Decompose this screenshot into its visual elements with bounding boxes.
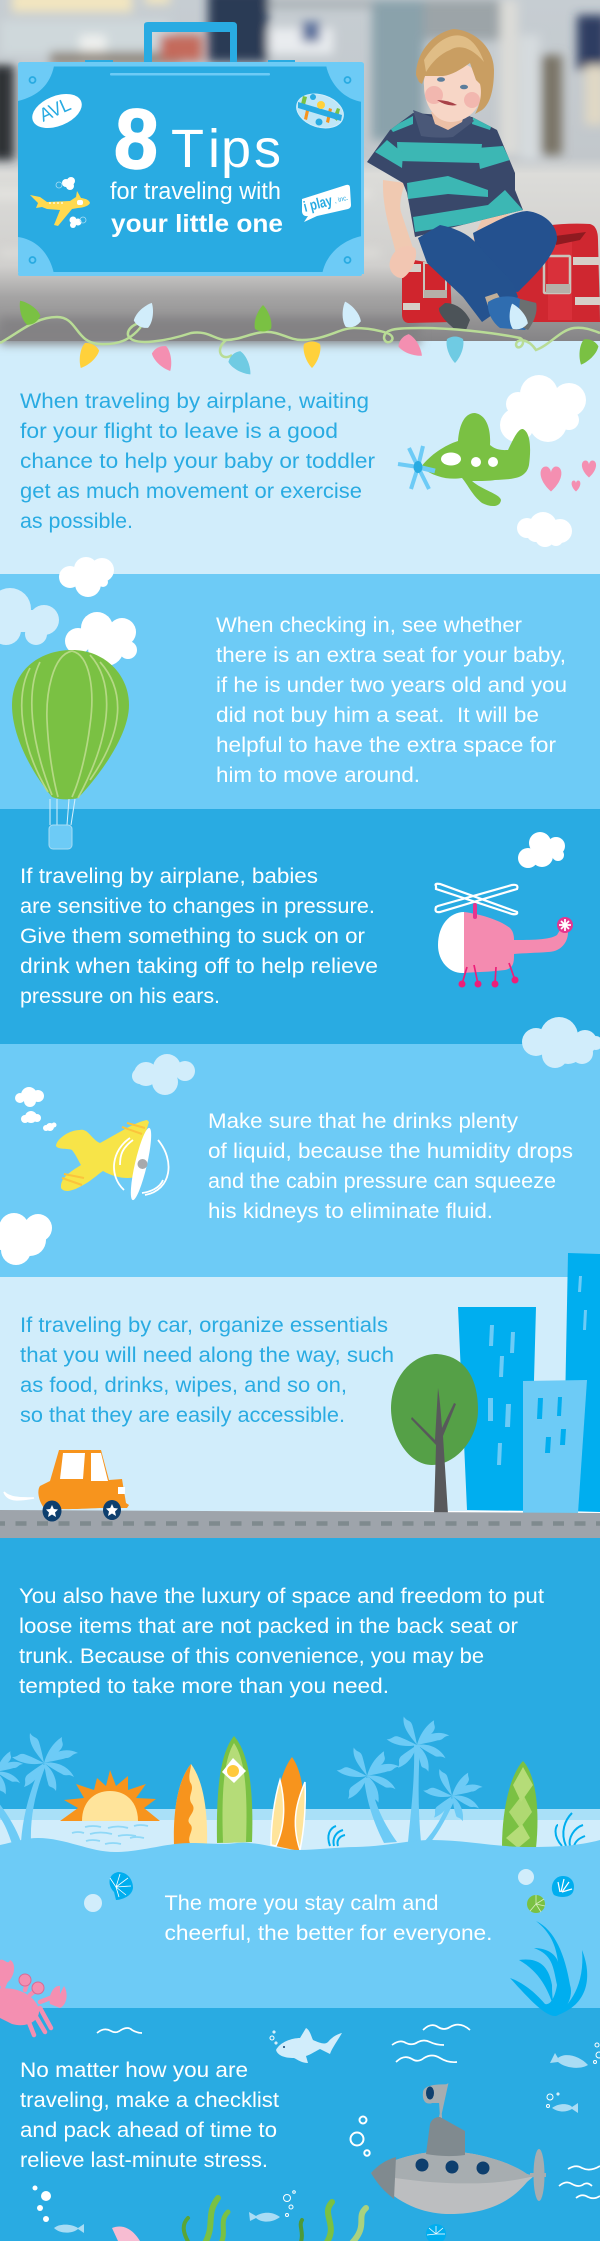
cloud: pale left (0, 588, 59, 645)
icon: large seaweed (510, 1921, 587, 2016)
hand (390, 246, 416, 278)
cloud: white by helicopter (518, 832, 565, 868)
fish and bubbles (32, 2043, 600, 2233)
water ripples (72, 1825, 148, 1844)
subtitle line 1: for traveling with (110, 178, 281, 205)
face (424, 62, 482, 122)
tip 1 text (20, 390, 375, 533)
water squiggles (97, 2025, 600, 2198)
tip 1 text: get as much movement or exercise (20, 480, 362, 503)
icon: green airplane (398, 413, 530, 506)
shells (84, 1869, 574, 1913)
surfboard: orange (271, 1757, 305, 1851)
cloud: white behind green plane (500, 375, 586, 442)
bulbs (20, 300, 598, 374)
tip 4 text: of liquid, because the humidity drops (208, 1140, 573, 1163)
surfboard: orange wave (174, 1764, 207, 1846)
beach scene (0, 1716, 600, 1860)
hair (416, 29, 494, 114)
tip 5 text: as food, drinks, wipes, and so on, (20, 1374, 347, 1397)
sticker: i play speech bubble: i play (302, 192, 335, 216)
tip 5 text (20, 1314, 394, 1427)
tip 3 text: If traveling by airplane, babies (20, 865, 318, 888)
suitcase title card (18, 22, 364, 276)
icon: city buildings (458, 1253, 600, 1513)
tip 3 text: Give them something to suck on or (20, 925, 365, 948)
icon: hot air balloon (12, 650, 129, 849)
surfboard: green flower (217, 1736, 252, 1843)
sticker: AVL: AVL (36, 94, 74, 127)
surfboard: green diamonds (502, 1761, 537, 1848)
tip 8 text: No matter how you are (20, 2059, 248, 2082)
tip 7 text (164, 1892, 492, 1945)
title: 8: 8 (112, 91, 161, 188)
icon: yellow airplane (56, 1120, 169, 1201)
cloud: pale crossing bands (522, 1017, 600, 1068)
tip 3 text (20, 865, 378, 1008)
shoes and socks (439, 293, 537, 330)
tip 8 text: traveling, make a checklist (20, 2089, 279, 2112)
tip 2 text: if he is under two years old and you (216, 674, 567, 697)
collar (413, 110, 474, 138)
shirt (367, 113, 523, 237)
tip 4 text: and the cabin pressure can squeeze (208, 1170, 556, 1193)
tip 3 text: drink when taking off to help relieve (20, 955, 378, 978)
sticker: beach oval (296, 94, 344, 128)
palm trees (0, 1716, 483, 1844)
icon: pink crab (0, 1960, 67, 2035)
tip 2 text (216, 614, 567, 787)
tip 4 text (208, 1110, 573, 1223)
sea plants: small (328, 1813, 585, 1846)
tip 1 text: When traveling by airplane, waiting (20, 390, 369, 413)
photo background: blurred airport (0, 0, 600, 344)
tip 6 text (19, 1585, 544, 1698)
photo: boy sitting on red suitcase (360, 29, 600, 330)
suitcase rivets (30, 77, 350, 263)
suitcase body (18, 62, 364, 275)
tip 7 text: The more you stay calm and (164, 1892, 438, 1915)
subtitle line 2: your little one (111, 210, 283, 238)
cloud: white small (517, 512, 572, 547)
tip 1 text: as possible. (20, 510, 133, 533)
tip 7 text: cheerful, the better for everyone. (164, 1922, 492, 1945)
arms (383, 180, 413, 254)
cloud: white behind balloon (65, 612, 137, 666)
icon: submarine (350, 2085, 546, 2214)
icon: orange car (4, 1450, 129, 1522)
tip 3 text: pressure on his ears. (20, 985, 220, 1008)
tip 8 text: and pack ahead of time to (20, 2119, 277, 2142)
tip 2 text: him to move around. (216, 764, 420, 787)
beach bands (0, 1809, 600, 1852)
icon: hearts (541, 460, 596, 492)
shells bottom (112, 2224, 446, 2241)
tip 6 text: loose items that are not packed in the back seat or (19, 1615, 518, 1638)
icon: pink helicopter (436, 884, 573, 988)
red suitcase (402, 224, 600, 323)
icon: shark (270, 2028, 342, 2063)
tip 6 text: You also have the luxury of space and freedom to put (19, 1585, 544, 1608)
tip 4 text: his kidneys to eliminate fluid. (208, 1200, 493, 1223)
tip 5 text: so that they are easily accessible. (20, 1404, 345, 1427)
tip 2 text: helpful to have the extra space for (216, 734, 556, 757)
cloud: pale centre (132, 1054, 195, 1095)
tip 3 text: are sensitive to changes in pressure. (20, 895, 375, 918)
cloud: white top (59, 557, 114, 597)
suitcase trim (18, 62, 364, 276)
tip 1 text: chance to help your baby or toddler (20, 450, 375, 473)
road (0, 1510, 600, 1538)
suitcase handle (144, 22, 237, 62)
tip 2 text: did not buy him a seat. It will be (216, 704, 539, 727)
title: Tips: Tips (171, 119, 281, 179)
tip 4 text: Make sure that he drinks plenty (208, 1110, 519, 1133)
jeans (418, 211, 557, 322)
tip 2 text: When checking in, see whether (216, 614, 522, 637)
tip 6 text: tempted to take more than you need. (19, 1675, 389, 1698)
sticker: i play speech bubble: , inc. (334, 195, 349, 205)
clouds: thought puffs (15, 1087, 56, 1131)
tip 5 text: If traveling by car, organize essentials (20, 1314, 388, 1337)
water wave (0, 1838, 600, 1860)
seaweed bottom (184, 2198, 366, 2241)
string of holiday lights (0, 300, 600, 374)
tip 1 text: for your flight to leave is a good (20, 420, 338, 443)
tip 8 text: relieve last-minute stress. (20, 2149, 268, 2172)
sticker: i play speech bubble (302, 185, 351, 222)
icon: tree (391, 1354, 478, 1514)
icon: sun (60, 1770, 160, 1821)
face features (437, 77, 468, 105)
tip 5 text: that you will need along the way, such (20, 1344, 394, 1367)
sticker: yellow plane with clouds (30, 177, 90, 228)
tip 2 text: there is an extra seat for your baby, (216, 644, 566, 667)
tip 8 text (20, 2059, 279, 2172)
tip 6 text: trunk. Because of this convenience, you may be (19, 1645, 484, 1668)
neck (431, 112, 465, 130)
cloud: white bottom left (0, 1213, 52, 1265)
